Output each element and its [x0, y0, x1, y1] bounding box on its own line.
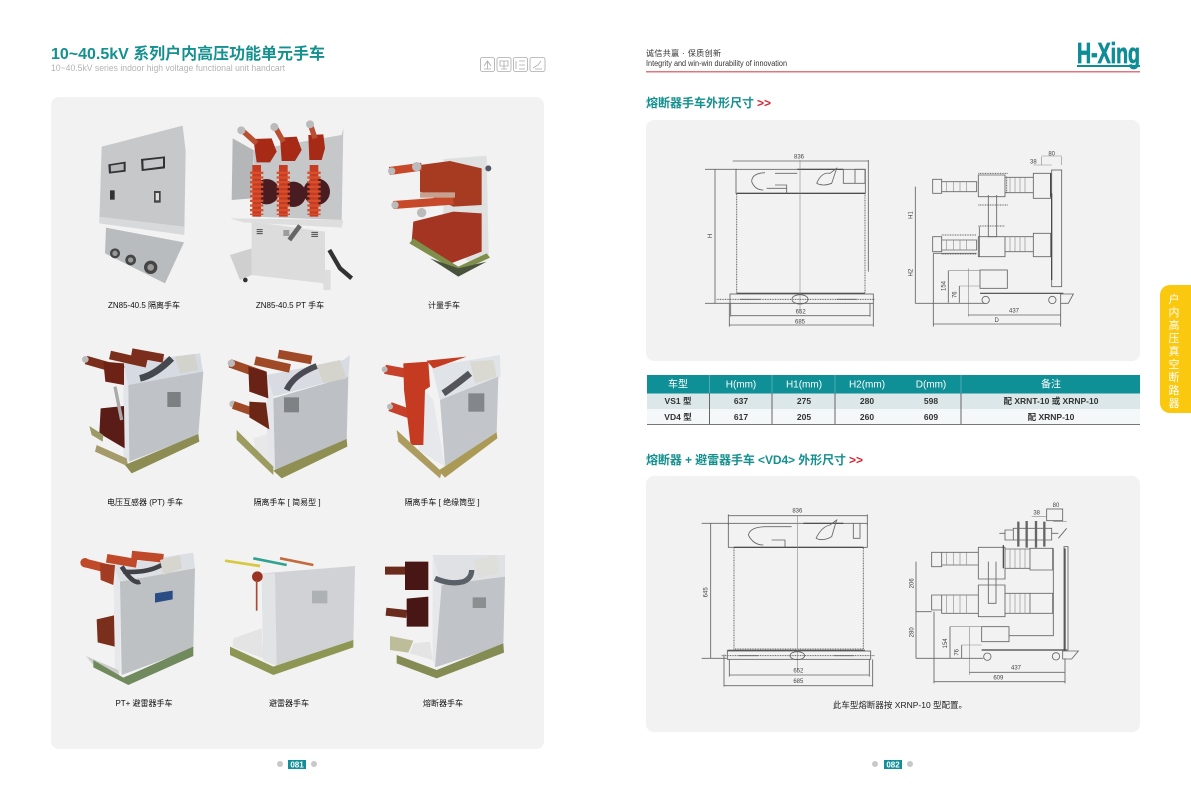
- drawing: side view VD4: 76: [954, 648, 960, 656]
- drawing: side view VD4: 154: [943, 638, 949, 648]
- drawing: side view VD4: 38: [1033, 510, 1041, 516]
- page number left: 081: [290, 760, 304, 770]
- drawing: front view VD4: 685: [793, 679, 804, 685]
- drawing: front view: 836: [794, 155, 805, 161]
- side tab: 户: [1168, 292, 1180, 306]
- photo: PT plus arrester handcart: [80, 553, 195, 685]
- side tab: 高: [1168, 318, 1180, 332]
- drawing: side view VD4: [909, 503, 1078, 683]
- dimensions table: 280: [860, 396, 874, 406]
- dimensions table: 598: [924, 396, 938, 406]
- drawing: side view: [909, 151, 1073, 327]
- caption: 隔离手车 [ 绝缘筒型 ]: [404, 497, 480, 507]
- drawing: side view VD4: 437: [1011, 666, 1022, 672]
- heading: fuse and arrester handcart dimensions: >>: [849, 453, 863, 467]
- side tab: 断: [1168, 370, 1180, 384]
- photo: isolating handcart insulating tube type: [382, 355, 501, 478]
- dimensions table: H2(mm): [849, 380, 885, 390]
- icon row: certification badges: [480, 58, 545, 72]
- photo: fuse handcart: [385, 555, 505, 678]
- side tab: 真: [1168, 344, 1180, 358]
- heading: fuse handcart dimensions: >>: [757, 96, 771, 110]
- caption: 计量手车: [428, 300, 460, 310]
- subtitle: 10~40.5kV series indoor high voltage functional unit handcart: [51, 63, 285, 74]
- side tab: 内: [1168, 305, 1180, 319]
- side tab: 空: [1168, 357, 1180, 371]
- page number right: [872, 760, 913, 770]
- drawing: front view VD4: 836: [792, 508, 803, 514]
- header slogan: 诚信共赢 · 保质创新: [646, 48, 721, 58]
- caption: 熔断器手车: [423, 698, 463, 708]
- photo: voltage transformer PT handcart: [82, 353, 203, 473]
- dimensions table: 车型: [668, 378, 688, 390]
- panel: drawing 2: [646, 476, 1140, 732]
- caption: 避雷器手车: [269, 698, 309, 708]
- heading: fuse and arrester handcart dimensions: 熔断器 + 避雷器手车 <VD4> 外形尺寸: [646, 452, 846, 467]
- caption: 电压互感器 (PT) 手车: [107, 497, 183, 507]
- drawing: side view: H1: [909, 211, 915, 219]
- drawing: front view: 685: [795, 319, 806, 325]
- dimensions table: 609: [924, 412, 938, 422]
- drawing: side view VD4: 206: [909, 578, 915, 588]
- page number left: [277, 760, 317, 770]
- dimensions table: 260: [860, 412, 874, 422]
- page number right: 082: [886, 760, 900, 770]
- photo: metering handcart: [388, 156, 491, 277]
- drawing: side view: 76: [953, 291, 959, 298]
- dimensions table: 配 XRNP-10: [1028, 412, 1075, 422]
- heading: fuse handcart dimensions: 熔断器手车外形尺寸: [646, 95, 754, 110]
- dimensions table: 275: [797, 396, 811, 406]
- drawing: front view: 652: [796, 309, 806, 315]
- logo: H-Xing: [1077, 38, 1140, 70]
- drawing: side view: 38: [1030, 159, 1037, 165]
- dimensions table: 637: [734, 396, 748, 406]
- header slogan: [646, 48, 787, 68]
- title: [51, 44, 325, 74]
- panel: drawing 1: [646, 120, 1140, 361]
- drawing: front view VD4: [702, 508, 875, 687]
- photo: ZN85-40.5 PT handcart: [230, 120, 352, 290]
- drawing note: 此车型熔断器按 XRNP-10 型配置。: [833, 700, 967, 710]
- drawing: front view: [705, 155, 875, 327]
- dimensions table: 配 XRNT-10 或 XRNP-10: [1004, 396, 1099, 406]
- drawing: side view: 437: [1009, 309, 1020, 315]
- side tab: [1160, 285, 1191, 413]
- drawing: side view: D: [994, 318, 999, 324]
- drawing: front view VD4: 645: [703, 587, 709, 597]
- photo: arrester handcart: [225, 558, 355, 675]
- caption: PT+ 避雷器手车: [115, 698, 173, 708]
- logo: [1077, 38, 1140, 70]
- drawing: side view VD4: 80: [1053, 503, 1060, 509]
- side tab: 器: [1168, 397, 1180, 410]
- photo: ZN85-40.5 isolating handcart: [99, 126, 186, 283]
- caption: ZN85-40.5 隔离手车: [108, 300, 180, 310]
- side tab: 压: [1168, 332, 1180, 345]
- header slogan: Integrity and win-win durability of innovation: [646, 59, 787, 68]
- dimensions table: D(mm): [916, 380, 946, 390]
- dimensions table: 备注: [1041, 378, 1061, 390]
- drawing: front view VD4: 652: [793, 668, 804, 674]
- title: 10~40.5kV 系列户内高压功能单元手车: [51, 44, 325, 63]
- drawing: side view: 80: [1048, 151, 1056, 157]
- side tab: 路: [1168, 384, 1180, 397]
- dimensions table: H1(mm): [786, 380, 822, 390]
- dimensions table: H(mm): [726, 380, 756, 390]
- drawing: side view VD4: 609: [993, 675, 1004, 681]
- drawing: side view VD4: 280: [909, 627, 915, 637]
- dimensions table: 617: [734, 412, 748, 422]
- drawing: side view: 154: [942, 280, 948, 291]
- header rule: [646, 71, 1140, 72]
- panel: product photos: [51, 97, 544, 749]
- dimensions table: [647, 375, 1140, 425]
- dimensions table: VS1 型: [665, 396, 692, 406]
- caption: ZN85-40.5 PT 手车: [256, 300, 324, 310]
- dimensions table: 205: [797, 412, 811, 422]
- dimensions table: VD4 型: [664, 412, 692, 422]
- caption: 隔离手车 [ 简易型 ]: [253, 497, 321, 507]
- drawing: side view: H2: [909, 268, 915, 276]
- drawing: front view: H: [708, 234, 714, 238]
- photo: isolating handcart simple type: [228, 354, 350, 478]
